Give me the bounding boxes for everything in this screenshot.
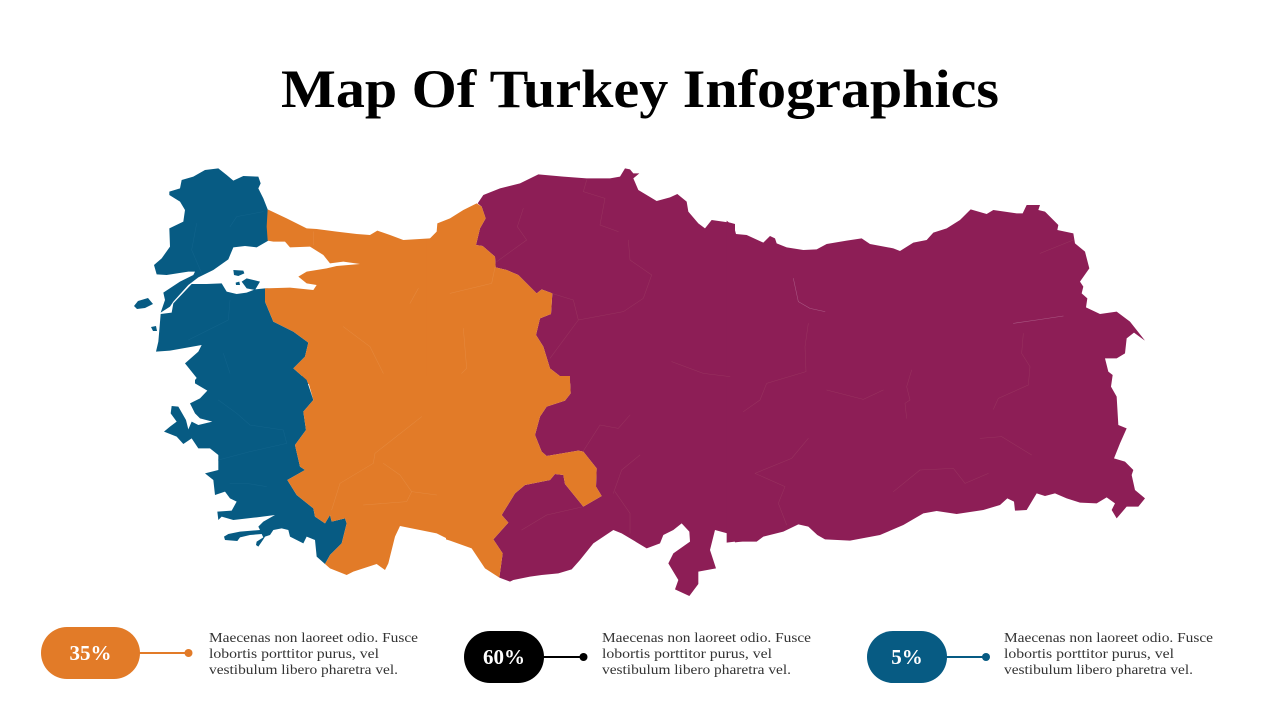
map of Turkey bbox=[134, 168, 1145, 596]
pill: 35% bbox=[41, 627, 140, 679]
legend item: 35% bbox=[41, 627, 418, 679]
pill: 35%: 35% bbox=[70, 641, 112, 665]
connector: orange bbox=[139, 649, 192, 657]
connector: blue bbox=[946, 653, 990, 661]
text block: Maecenas non laoreet odio. Fusce bbox=[1004, 631, 1213, 646]
text block: lobortis porttitor purus, vel bbox=[602, 647, 772, 662]
region: central west (orange) bbox=[265, 203, 602, 578]
title: Map Of Turkey Infographics bbox=[281, 59, 999, 119]
text block: vestibulum libero pharetra vel. bbox=[602, 663, 791, 678]
pill: 5%: 5% bbox=[891, 645, 923, 669]
legend item: 5% bbox=[867, 631, 1213, 683]
text block: Maecenas non laoreet odio. Fusce bbox=[209, 631, 418, 646]
region: west coast (blue) bbox=[134, 168, 347, 564]
pill: 60%: 60% bbox=[483, 645, 525, 669]
text block: Maecenas non laoreet odio. Fusce bbox=[602, 631, 811, 646]
pill: 5% bbox=[867, 631, 947, 683]
legend item: 60% bbox=[464, 631, 811, 683]
text block: vestibulum libero pharetra vel. bbox=[209, 663, 398, 678]
region: east (purple) bbox=[476, 168, 1145, 596]
text block: vestibulum libero pharetra vel. bbox=[1004, 663, 1193, 678]
connector: black bbox=[543, 653, 588, 661]
text block: lobortis porttitor purus, vel bbox=[1004, 647, 1174, 662]
pill: 60% bbox=[464, 631, 544, 683]
text block: lobortis porttitor purus, vel bbox=[209, 647, 379, 662]
